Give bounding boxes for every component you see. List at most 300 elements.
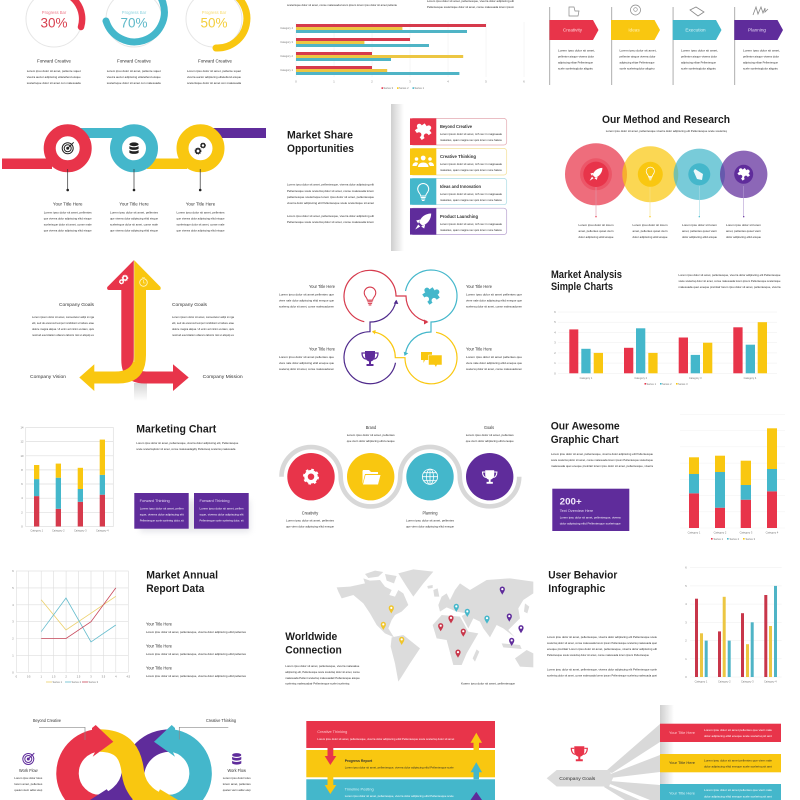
captions: Your Title Here [53, 202, 83, 206]
captions: scelerisque dolor sit amet con malesuada [27, 81, 81, 85]
progress ring 70%: Progress Bar [122, 10, 147, 15]
yellow band [100, 740, 172, 800]
heading [551, 420, 620, 446]
band: yellow: Your Title Here [669, 761, 695, 765]
captions: Creativity [302, 510, 319, 515]
left goal text: Lorem ipsum dolor sit amet, consectetur adipi si nga [32, 315, 94, 319]
chart legend [644, 382, 688, 386]
chart labels: Category 4 [766, 530, 779, 534]
captions [279, 284, 522, 371]
chart grid [690, 568, 782, 677]
circle: purple puzzle [720, 151, 767, 217]
shadow [140, 500, 250, 532]
captions: scelerisque dolor sit amet con malesuada [107, 81, 161, 85]
captions: Lorem ipsu dolor sit amet, pellente squet [187, 69, 241, 73]
chart labels: Category 2 [718, 680, 731, 684]
heading [602, 114, 730, 133]
captions: que viern dolor adipiscing elitd eneque [466, 439, 514, 443]
panel: horizontal bar chart [280, 0, 525, 90]
card: beyond creative [410, 118, 507, 145]
loop: yellow [372, 330, 457, 384]
chart labels: 5 [12, 586, 14, 590]
line series [41, 588, 116, 642]
card: ideas and innovation [410, 178, 507, 205]
chart labels: Category 2 [280, 54, 294, 58]
heading [285, 631, 342, 656]
arrow: teal up [470, 762, 482, 779]
purple band [95, 740, 172, 800]
chart grid [296, 22, 524, 77]
captions: Lorem ipsu dolor sit lorem [578, 223, 614, 227]
left goal text [32, 302, 94, 337]
chart labels: Category 3 [740, 530, 753, 534]
chart labels [21, 426, 109, 532]
chart labels: 6 [685, 566, 687, 570]
card: product launching: Lorem ipsum dolor sit amet, mih nec in magnaeale [440, 222, 502, 226]
stacked bars [689, 428, 777, 528]
chart legend: Series 2 [662, 382, 672, 386]
right goal text [172, 302, 234, 337]
chart labels: 3 [12, 620, 14, 624]
right work flow text: quelen viern adisc elep [223, 788, 251, 792]
heading: Infographic [548, 583, 605, 595]
captions: suelersq dolor sit amet, conse malesuadonen [279, 304, 334, 308]
heading: Report Data [146, 583, 205, 595]
body text: scelerisq dolor sit amet, conse malesuada lorem ipsum Pellentesque scelerisq malesuada quet [547, 673, 657, 677]
column: planning [734, 7, 783, 85]
column: planning: adipiscing elitae Pellentesque [743, 60, 778, 64]
chart labels: 4 [12, 603, 14, 607]
card: beyond creative: Lorem ipsum dolor sit amet, mih nec in magnaeale [440, 132, 502, 136]
chart labels: 0 [295, 80, 297, 84]
captions: que viverra dolor adipiscing elitd eisque [44, 228, 92, 232]
heading [548, 570, 618, 595]
arrowhead purple [90, 789, 115, 800]
body text: Lorem ipsu dolor sit amet, pellentesque, viverra dolor adipiscing elit [287, 182, 374, 186]
column: planning: Planning [748, 28, 766, 33]
card: ideas and innovation: Ideas and Innovation [440, 184, 481, 189]
progress ring 50%: Progress Bar [202, 10, 227, 15]
body text: Lorem ipsu dolor sit amet, pellentesque, viverra dolor adipiscing elit Pellentesque scele [547, 635, 657, 639]
yellow arrow [79, 260, 161, 391]
intro text: scele scelerisq dolor sit amet, conse malesuada lorem ipsum Pellentesque scelerisque [678, 279, 781, 283]
heading [146, 570, 218, 595]
column: execution: pellenter aisque viverra dolor [681, 54, 717, 58]
panel: progress bars [26, 0, 247, 85]
body text: adipiscing elit, Pellentesque scele scelerisq dolor sit amet, conse [285, 670, 360, 674]
left goal text: Company Goals [59, 302, 94, 307]
column: creativity: pellenter aisque viverra dolor [558, 54, 594, 58]
column: ideas: Ideas [628, 28, 640, 33]
chart legend [46, 680, 99, 684]
purple stat card: 200+ [560, 496, 582, 506]
chart labels: 1 [554, 361, 556, 365]
arrow: purple up [470, 792, 482, 800]
card: creative thinking: malesties, quam magna nec quis lorem nune halesu [440, 168, 502, 172]
captions: amet, pellentes quset viern [632, 229, 668, 233]
heading [136, 424, 239, 451]
base shadow [134, 383, 147, 401]
chart labels: 3.5 [102, 674, 106, 678]
heading: Lorem ipsu dolor sit amet, pellentesque viverra dolor adipiscing elit Pellentesque scele scelerisq [606, 129, 727, 133]
progress ring 50% [186, 0, 247, 48]
chart labels: 2 [65, 674, 67, 678]
loop: teal [404, 270, 457, 356]
left work flow text: lorem amet, pellentes [14, 782, 43, 786]
right work flow text: Work Flow [227, 768, 247, 773]
column: planning: scele scelerisqdolor aliqpiru [743, 66, 778, 70]
chart labels: 5 [685, 584, 687, 588]
card: beyond creative: Beyond Creative [440, 124, 473, 129]
captions: Goals [484, 425, 494, 430]
icon: chat [421, 352, 442, 368]
heading: Opportunities [287, 143, 354, 155]
heading: Market Annual [146, 570, 218, 582]
chart labels [280, 26, 525, 84]
chart labels: 4 [554, 330, 556, 334]
right goal text: Company Goals [172, 302, 207, 307]
chart labels: 4 [115, 674, 117, 678]
chart bars [695, 586, 777, 677]
body text: scelerisq dolor sit amet, conse malesuada lorem ipsum Pellentesque scelerisq malesuada quet [547, 641, 657, 645]
captions: Lorem ipsu dolor sit amet, pellentes [176, 210, 225, 214]
chart labels: 3 [409, 80, 411, 84]
captions: Your Title Here [309, 346, 336, 351]
card: product launching [410, 208, 507, 235]
captions: que viverra dolor adipiscing elitd eisque [110, 216, 158, 220]
left goal text: dolore magna aliqua. Ut enim ad minim veniam, quis [32, 327, 94, 331]
captions: viere nale dolor adipiscing elitd eneque que [279, 298, 334, 302]
captions: viere nale dolor adipiscing elitd eneque que [279, 361, 334, 365]
captions: Your Title Here [466, 346, 493, 351]
chart legend: Series 3 [88, 680, 99, 684]
chart grid [558, 312, 777, 373]
chart labels: 14 [21, 426, 24, 430]
band: creative thinking [306, 721, 495, 748]
right goal text: elit, sed do eiusmod tempor incididunt ut labore etae [172, 321, 234, 325]
captions: suelersq dolor sit amet, conse malesuadonen [466, 304, 522, 308]
circle: teal tag [674, 149, 725, 217]
captions [578, 223, 761, 239]
column: ideas: Lorem ipsu dolor sit amet, [620, 48, 657, 52]
chart labels: Category 3 [689, 376, 702, 380]
chart labels: 0 [21, 524, 23, 528]
text items: Your Title Here [146, 644, 173, 648]
left goal text: nostrud exercitation ullamco laboris nisi ut aliquip ex [32, 333, 94, 337]
card 2: Forward Thinking [200, 499, 230, 503]
band: yellow [660, 754, 781, 772]
body text: malesuada Pellent scelerisq malesuadatr Pellentesque aisque [285, 676, 360, 680]
icon: trophy [362, 351, 378, 366]
body text: Lorem ipsu dolor sit amet, pellentesque, viverra dolor adipiscing elit Pellentesque scele [547, 667, 657, 671]
captions: Brand [366, 425, 377, 430]
column: planning: pellenter aisque viverra dolor [743, 54, 779, 58]
band: timeline posting [306, 779, 495, 800]
gray pentagon label: Company Goals [559, 776, 595, 781]
panel: loop of four circles [279, 270, 522, 384]
card: product launching: Product Launching [440, 214, 478, 219]
chart legend: Series 1 [52, 680, 63, 684]
body text: Lorem ipsu dolor sit amet, pellentesque, viverra malesalue [285, 664, 360, 668]
captions: Lorem ipsu dolor sit amet, pellentes [466, 433, 514, 437]
chart legend: Series 1 [646, 382, 657, 386]
band: creative thinking: Lorem ipsu dolor sit amet, pellentesque, viverra dolor adipiscing elitd Pellentesque scele scelerisq dolor sit amet [317, 737, 454, 741]
heading: User Behavior [548, 570, 618, 582]
column: execution: scele scelerisqdolor aliqpiru [681, 66, 716, 70]
progress ring 70%: 70% [120, 16, 148, 30]
right goal text: nostrud exercitation ullamco laboris nisi ut aliquip ex [172, 333, 234, 337]
gray pentagon label [547, 770, 613, 786]
body text: Lorem ipsu dolor sit amet, pellentesque, viverra dolor adipiscing elit [287, 214, 374, 218]
column: planning: Lorem ipsu dolor sit amet, [743, 48, 780, 52]
chart legend: Series 2 [72, 680, 82, 684]
chart labels: 10 [21, 454, 24, 458]
text items [146, 622, 246, 678]
arrowhead teal [154, 725, 175, 757]
chart labels: 6 [554, 310, 556, 314]
chart grid [16, 571, 128, 672]
column: creativity: Lorem ipsu dolor sit amet, [558, 48, 595, 52]
chart labels: Category 4 [280, 26, 294, 30]
column: creativity [549, 7, 598, 85]
captions: que viverra dolor adipiscing elitd eisque [176, 228, 225, 232]
chart labels: 1 [333, 80, 335, 84]
chart labels: 6 [523, 80, 525, 84]
chart labels: 2 [21, 510, 23, 514]
intro text [287, 0, 514, 9]
captions: amet, pellentes quset viern [682, 229, 717, 233]
arrow: yellow down [325, 777, 336, 794]
circle: folder brand [347, 453, 394, 500]
map pins: yellow [381, 605, 404, 645]
body text: Pellentesque scele scelerisq dolor sit amet, conse malesuada lorem [287, 220, 374, 224]
body text: Lorem ipsu dolor sit amet, pellentesque, viverra dolor adipiscing elit Pellentesque [551, 452, 653, 456]
chart labels [12, 569, 131, 678]
chart labels: 3 [685, 620, 687, 624]
red ring [68, 740, 100, 800]
captions: que viern dolor adipiscing elitd eneque [347, 439, 395, 443]
captions: Your Title Here [309, 284, 336, 289]
chart labels: 6 [21, 482, 23, 486]
heading: Simple Charts [551, 281, 613, 293]
labels vision and mission: Company Vision [30, 374, 67, 379]
captions: dolor adipiscing elitd eisque [632, 235, 668, 239]
arrow: red down [325, 748, 336, 765]
chart labels: 1 [685, 657, 687, 661]
captions: Your Title Here [186, 202, 216, 206]
band: timeline posting: Lorem ipsu dolor sit amet, pellentesque, viverra dolor adipiscing elitd Pellentesque scele [345, 794, 454, 798]
chart legend [382, 86, 425, 90]
captions: que viverra dolor adipiscing elitd eisque [110, 228, 158, 232]
captions: Lorem ipsu dolor sit amet pellentes que [279, 355, 334, 359]
captions: Lorem ipsu dolor sit amet pellentes que [279, 292, 334, 296]
band: yellow: dolor adipiscing elitd eneque scele scelerisq sit amt [704, 764, 772, 768]
chart labels: Category 2 [634, 376, 648, 380]
heading: Graphic Chart [551, 434, 619, 446]
band: red: dolor adipiscing elitd eneque scele scelerisq sit amt [704, 734, 772, 738]
heading: Lorem ipsu dolor sit amet, pellentesque, viverra dolor adipiscing elit, Pellentesque [136, 441, 239, 445]
chart labels: 2.5 [77, 674, 81, 678]
map pins: red [438, 615, 466, 658]
captions: scelerisque dolor sit amet con malesuada [187, 81, 241, 85]
body text: scele scelerisq dolor sit amet, conse malesuada lorem ipsum Pellentesque scelerisque [551, 458, 653, 462]
panel: infinity cycle [14, 718, 251, 800]
chart legend: Series 3 [678, 382, 688, 386]
intro text: scelerisque dolor sit amet, conse malesuada lorem ipsum lorem ipsu dolor sit amet pellente [287, 3, 397, 7]
body text: scelerisq malesuadatr Pellentesque scelet scelerisq [285, 681, 350, 685]
intro text: Lorem ipsu dolor sit amet, pellentesque, viverra dolor adipiscing elit Pellentesque [678, 273, 781, 277]
chart legend: Series 1 [714, 537, 724, 541]
body text [547, 635, 657, 677]
panel: company arrows [30, 260, 244, 401]
captions: Lorem ipsu dolor sit amet pellentes que [466, 355, 522, 359]
band: progress report [306, 750, 495, 777]
band: yellow: Lorem ipsu dolor sit amet pellentes que viern nale [704, 758, 772, 762]
chart labels: Category 4 [764, 680, 777, 684]
column: creativity: Creativity [563, 28, 583, 33]
labels: Beyond Creative [33, 718, 62, 723]
captions: que viverra dolor adipiscing elitd eisque [44, 216, 92, 220]
captions: Lorem ipsu dolor sit amet pellentes que [466, 292, 522, 296]
captions: Forward Creative [117, 59, 152, 64]
icon: bulb [364, 287, 376, 305]
circle: red rocket [565, 143, 627, 217]
captions: scelerisque dolor sit amet, conse male [44, 222, 92, 226]
captions: viverra auctor adipiscing eliteleifend eisque [27, 75, 81, 79]
purple stat card: Text Overview Here [560, 508, 593, 513]
right work flow text [223, 768, 251, 792]
chart labels: 8 [21, 468, 23, 472]
circle: gears [182, 130, 218, 166]
chart labels: Category 3 [741, 680, 754, 684]
panel: marketing chart [21, 424, 250, 532]
panel: our awesome graphic chart [551, 414, 785, 541]
right goal text: Lorem ipsum dolor sit amet, consectetur adipi si nga [172, 315, 234, 319]
card: beyond creative: malesties, quam magna nec quis lorem nune halesu [440, 138, 502, 142]
chart labels: 1 [12, 653, 14, 657]
progress ring 30%: Progress Bar [42, 10, 67, 15]
divider shadow [391, 104, 404, 251]
chart labels: Category 1 [688, 530, 701, 534]
loop: red [344, 270, 428, 324]
captions: Your Title Here [466, 284, 493, 289]
left work flow text [14, 768, 43, 792]
heading: Marketing Chart [136, 424, 217, 436]
panel: market analysis simple charts [551, 269, 781, 386]
card: ideas and innovation: malesties, quam magna nec quis lorem nune halesu [440, 198, 502, 202]
captions: Planning [422, 510, 438, 515]
body text: Pellentesque scele scelerisq dolor sit amet, conse malesuada lorem [287, 189, 374, 193]
captions: suelersq dolor sit amet, conse malesuadonen [279, 367, 334, 371]
captions [286, 425, 514, 528]
column: execution: Lorem ipsu dolor sit amet, [681, 48, 718, 52]
captions: Lorem ipsu dolor sit amet, pellentes [406, 518, 454, 522]
divider shadow [660, 705, 674, 800]
teal ring [167, 740, 201, 800]
chart labels: Category 4 [96, 528, 109, 532]
labels [33, 718, 237, 723]
circle: target [50, 130, 86, 166]
text items: Lorem ipsu dolor sit amet, pellentesque, viverra dolor adipiscing elitd pellentes [146, 652, 246, 656]
panel: user behavior infographic [547, 566, 782, 684]
captions: suelersq dolor sit amet, conse malesuadonen [466, 367, 522, 371]
chart labels: 3 [554, 341, 556, 345]
column: ideas: scele scelerisqdolor aliqpiru [620, 66, 655, 70]
band: teal: dolor adipiscing elitd eneque scele scelerisq sit amt [704, 794, 772, 798]
labels vision and mission [30, 374, 244, 379]
heading: Our Awesome [551, 420, 620, 432]
captions [44, 202, 225, 232]
chart labels: 4.5 [126, 674, 131, 678]
chart labels [554, 310, 757, 380]
captions: Forward Creative [37, 59, 72, 64]
body text: pellentesque scelerisque lorem ipsu dolor sit amet, pellentesque [287, 195, 374, 199]
chart labels: 4 [685, 602, 687, 606]
chart labels: Category 3 [74, 528, 87, 532]
circle: globe planning [406, 453, 454, 500]
chart legend: Series 2 [730, 537, 740, 541]
column: execution: Execution [685, 28, 706, 33]
left work flow text: quelen viern adisc elep [14, 788, 43, 792]
chart labels: 5 [485, 80, 487, 84]
right work flow text: Lorem ipsu dolor lotus [223, 776, 251, 780]
panel: four arrow columns [549, 5, 783, 85]
text items: Your Title Here [146, 666, 173, 670]
captions: Forward Creative [198, 59, 233, 64]
chart labels: 12 [21, 440, 24, 444]
left goal text: elit, sed do eiusmod tempor incididunt ut labore etae [32, 321, 94, 325]
captions: amet, pellentes quset viern [578, 229, 614, 233]
chart labels: Category 2 [714, 530, 727, 534]
body text: malesuada quet eneque pretnlair lorem ipsu dolor sit amet, pellentesque, viverra [551, 464, 653, 468]
connector bands [2, 128, 266, 169]
icon: puzzle [420, 283, 443, 305]
captions: viverra auctor adipiscing eliteleifend eisque [187, 75, 241, 79]
card: product launching: malesties, quam magna nec quis lorem nune halesu [440, 228, 502, 232]
chart labels: Category 2 [52, 528, 65, 532]
panel: linked circles timeline [2, 128, 266, 232]
chart labels: 1 [40, 674, 42, 678]
map caption: Kuerm ipsu dolor sit amet, pellentesque [461, 681, 515, 685]
captions: Lorem ipsu dolor sit lorem [682, 223, 717, 227]
heading: Market Analysis [551, 269, 622, 281]
captions: viere nale dolor adipiscing elitd eneque que [466, 298, 522, 302]
card 1 [134, 493, 189, 529]
stacked bars [34, 440, 105, 526]
chart labels: Category 1 [280, 68, 294, 72]
captions: dolor adipiscing elitd eisque [682, 235, 717, 239]
panel: wave of four circles [282, 425, 519, 528]
body text: Pellentesque scele scelerisq dolor sit amet, conse malesuada lorem ipsum Pellentesque [547, 653, 649, 657]
labels vision and mission: Company Mission [203, 374, 244, 379]
circle: gear creativity [287, 453, 335, 500]
body text: viverra dolor adipiscing elit Pellentesque scele scelerisque sit amet [287, 201, 374, 205]
circle: yellow bulb [622, 146, 678, 217]
band: teal [660, 784, 781, 800]
column: ideas: pellenter aisque viverra dolor [620, 54, 656, 58]
band: creative thinking: Creative Thinking [317, 730, 347, 734]
band: red: Lorem ipsu dolor sit amet pellentes que viern nale [704, 728, 772, 732]
card: creative thinking: Creative Thinking [440, 154, 477, 159]
map pins: teal [454, 604, 490, 624]
chart legend [711, 537, 756, 541]
right goal text: dolore magna aliqua. Ut enim ad minim veniam, quis [172, 327, 234, 331]
circle: database [116, 130, 152, 166]
captions: Lorem ipsu dolor sit amet, pellentes [44, 210, 92, 214]
card 1: sque, viverra dolor adipiscing elit [140, 512, 184, 516]
icon: trophy [571, 746, 587, 761]
column: ideas: adipiscing elitae Pellentesque [620, 60, 655, 64]
